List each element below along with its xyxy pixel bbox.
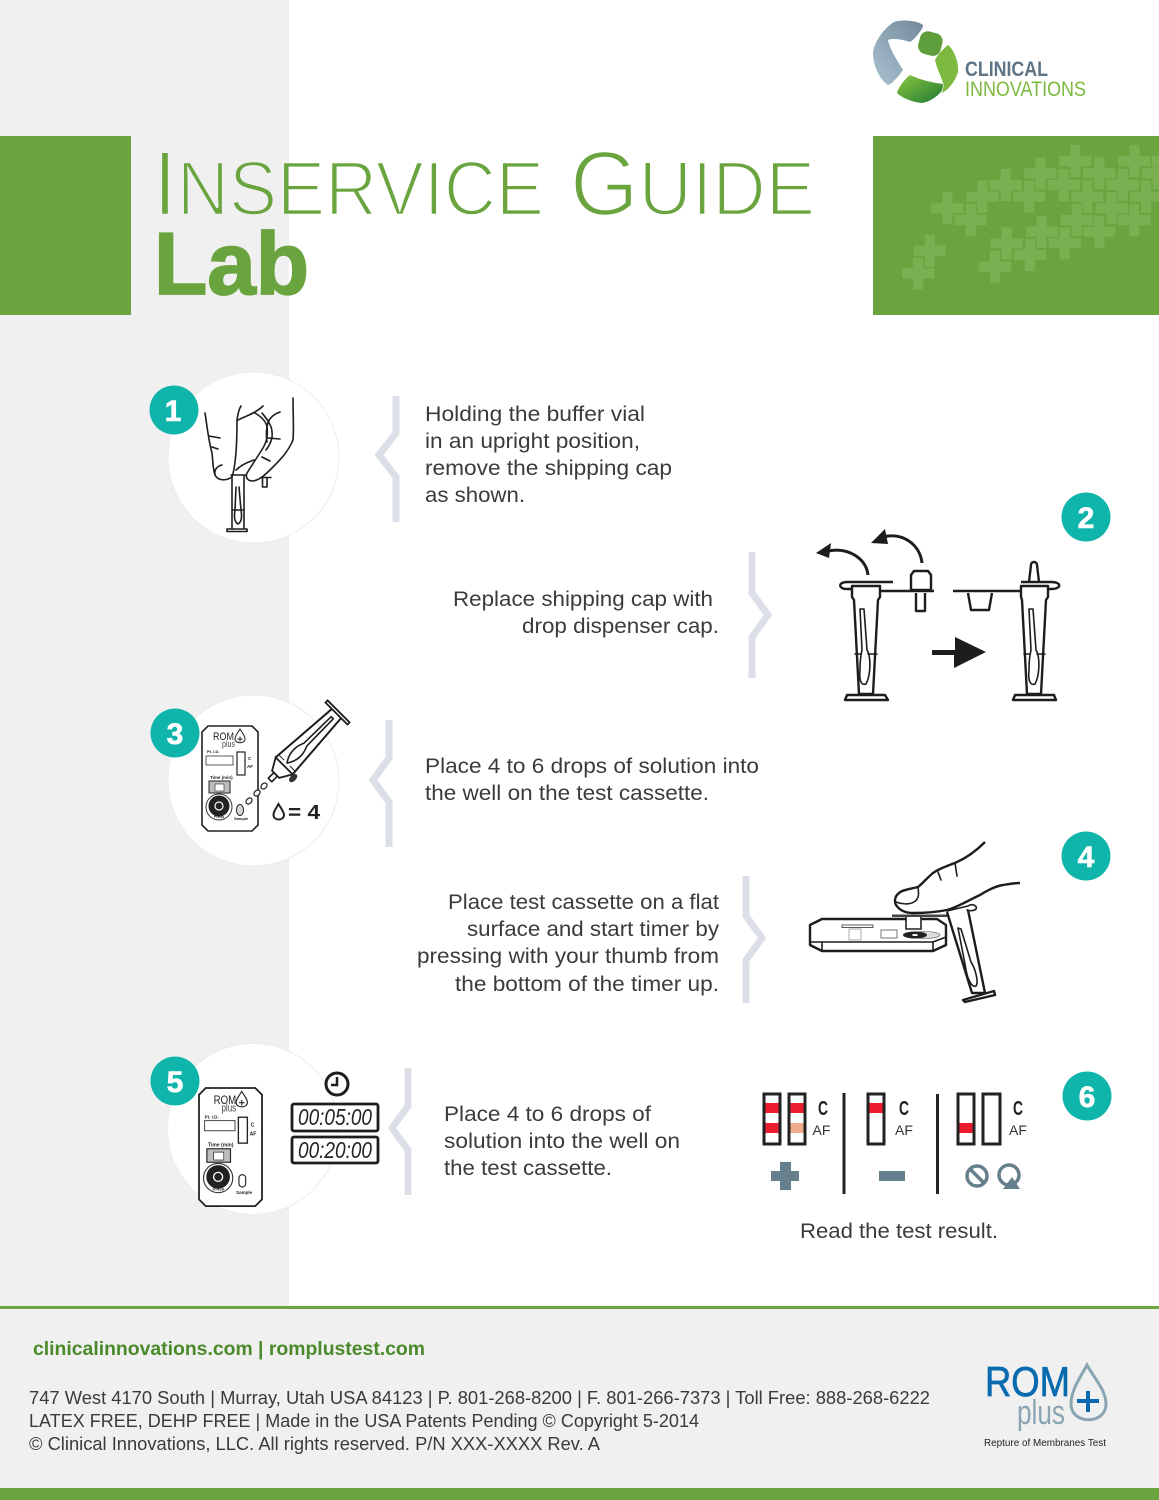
bracket step 3 xyxy=(373,720,389,847)
icon: test cassette: plus xyxy=(222,1103,236,1115)
icon: test cassette: Pt. I.D. xyxy=(207,749,219,754)
text step 4 xyxy=(417,891,720,996)
badge 4 xyxy=(1062,832,1110,880)
banner: left green block xyxy=(0,136,131,315)
footer links: clinicalinnovations.com | romplustest.com xyxy=(33,1339,425,1360)
logo: ROM plus: Repture of Membranes Test xyxy=(984,1437,1106,1449)
text step 4: surface and start timer by xyxy=(467,918,720,941)
badge 3: 3 xyxy=(167,718,183,751)
icon: test cassette xyxy=(199,1088,262,1206)
step 3 panel xyxy=(150,695,351,866)
text step 4: Place test cassette on a flat xyxy=(448,891,719,914)
icon: test cassette: Time (min) xyxy=(208,1143,234,1149)
icon: clock xyxy=(326,1073,348,1095)
badge 2: 2 xyxy=(1078,502,1094,535)
divider xyxy=(936,1094,939,1194)
badge 5 xyxy=(150,1056,200,1106)
test results chart xyxy=(764,1093,1027,1194)
footer address xyxy=(29,1388,930,1454)
equation: one drop equals four xyxy=(274,802,321,824)
icon: test cassette: Pt. I.D. xyxy=(205,1114,219,1119)
text step 5: the test cassette. xyxy=(444,1157,612,1180)
text step 5 xyxy=(444,1103,680,1180)
timer: twenty minutes: 00:20:00 xyxy=(298,1137,372,1163)
step 5 panel xyxy=(150,1044,338,1214)
badge 2 xyxy=(1062,492,1110,542)
equation: one drop equals four: = 4 xyxy=(288,802,321,824)
badge 1: 1 xyxy=(165,395,181,428)
text step 2 xyxy=(453,588,719,638)
drops xyxy=(245,782,268,805)
text step 1: Holding the buffer vial xyxy=(425,403,645,426)
logo: Clinical Innovations xyxy=(873,21,1086,103)
icon: test cassette: Time (min) xyxy=(210,775,233,780)
text step 2: drop dispenser cap. xyxy=(522,615,719,638)
badge 6: 6 xyxy=(1079,1081,1095,1114)
vial right xyxy=(953,562,1059,700)
logo: Clinical Innovations: INNOVATIONS xyxy=(965,78,1086,101)
icon: thumb pressing cassette xyxy=(810,842,1020,1002)
step 1 circle xyxy=(168,372,339,543)
result: invalid: C xyxy=(1013,1098,1023,1120)
result: positive xyxy=(764,1094,830,1190)
logo: Clinical Innovations: CLINICAL xyxy=(965,58,1048,81)
badge 4: 4 xyxy=(1078,841,1095,874)
title: GUIDE xyxy=(570,133,815,235)
divider xyxy=(842,1093,846,1194)
step 1 panel xyxy=(150,372,339,543)
icon: test cassette: AF xyxy=(247,764,253,769)
badge 6 xyxy=(1062,1072,1112,1120)
text step 5: solution into the well on xyxy=(444,1130,680,1153)
title: Lab xyxy=(154,214,309,313)
logo: ROM plus: ROM xyxy=(985,1358,1070,1405)
footer address: LATEX FREE, DEHP FREE | Made in the USA Patents Pending © Copyright 5-2014 xyxy=(29,1411,699,1431)
icon: test cassette: C xyxy=(251,1122,255,1128)
text step 1: as shown. xyxy=(425,484,525,507)
vial left xyxy=(840,571,934,700)
bracket step 4 xyxy=(746,876,762,1003)
icon: test cassette: Sample xyxy=(234,816,249,821)
result: invalid xyxy=(958,1094,1027,1189)
bracket step 1 xyxy=(379,396,396,522)
icon: test cassette: ROM xyxy=(213,731,234,743)
icon: dropper with falling drops xyxy=(259,700,351,793)
background panel: left grey column xyxy=(0,0,289,1307)
text step 5: Place 4 to 6 drops of xyxy=(444,1103,651,1126)
text step 4: pressing with your thumb from xyxy=(417,945,719,968)
footer panel xyxy=(0,1306,1159,1500)
title: INSERVICE xyxy=(153,133,544,235)
footer address: 747 West 4170 South | Murray, Utah USA 84123 | P. 801-268-8200 | F. 801-266-7373 | Toll Free: 888-268-6222 xyxy=(29,1388,930,1408)
badge 3 xyxy=(150,708,200,758)
badge 1 xyxy=(150,386,198,434)
icon: test cassette xyxy=(202,726,258,831)
icon: swapping shipping cap for dropper cap xyxy=(816,529,1059,700)
icon: test cassette: C xyxy=(248,756,252,761)
result: positive: C xyxy=(818,1098,828,1120)
big right arrow xyxy=(932,637,986,668)
text step 1: in an upright position, xyxy=(425,430,640,453)
bracket step 5 xyxy=(392,1068,408,1195)
result: positive: AF xyxy=(813,1122,830,1138)
logo: ROM plus: plus xyxy=(1017,1394,1065,1432)
result: negative xyxy=(868,1094,913,1181)
badge 5: 5 xyxy=(167,1066,183,1099)
text step 1 xyxy=(425,403,672,507)
step 3 circle xyxy=(168,695,339,866)
icon: test cassette: plus xyxy=(222,739,235,750)
icon: test cassette: ROM xyxy=(214,1093,236,1107)
icon: test cassette: Press xyxy=(214,815,224,819)
curved arrows xyxy=(816,529,922,575)
logo: ROM plus xyxy=(984,1358,1106,1449)
bracket step 2 xyxy=(752,552,768,678)
text step 2: Replace shipping cap with xyxy=(453,588,713,611)
timer: five minutes: 00:05:00 xyxy=(298,1104,372,1130)
banner: right green block with crosses xyxy=(873,136,1159,315)
icon: test cassette: Press xyxy=(212,1186,225,1191)
icon: test cassette: Sample xyxy=(236,1190,253,1195)
text step 3: the well on the test cassette. xyxy=(425,782,709,805)
result: negative: C xyxy=(899,1098,909,1120)
text step 4: the bottom of the timer up. xyxy=(455,973,719,996)
text step 1: remove the shipping cap xyxy=(425,457,672,480)
text step 6: Read the test result. xyxy=(800,1220,998,1243)
text step 3: Place 4 to 6 drops of solution into xyxy=(425,755,759,778)
step 5 circle xyxy=(168,1044,338,1214)
result: invalid: AF xyxy=(1009,1122,1027,1138)
footer address: © Clinical Innovations, LLC. All rights reserved. P/N XXX-XXXX Rev. A xyxy=(29,1434,600,1454)
icon: test cassette: AF xyxy=(250,1131,256,1137)
text step 3 xyxy=(425,755,759,805)
title xyxy=(153,133,815,313)
icon: hands removing shipping cap xyxy=(205,398,293,532)
result: negative: AF xyxy=(895,1122,913,1138)
